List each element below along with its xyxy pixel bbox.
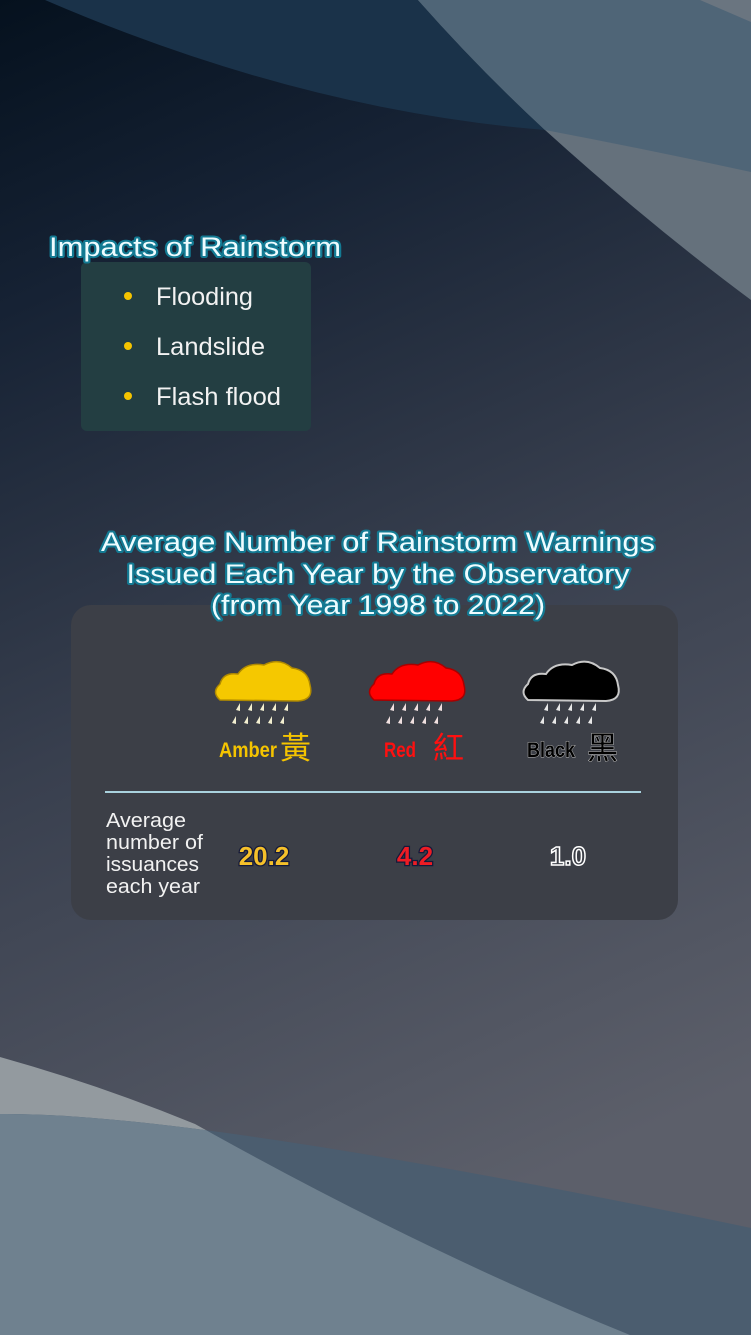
value: red: 4.2 [397,841,433,871]
decoration: top right wedge [418,0,751,300]
text block: row label: Average [106,810,186,832]
heading: Impacts of Rainstorm: Impacts of Rainstorm [49,232,341,262]
icon: black rainstorm: 黑 [587,723,618,768]
icon: red rainstorm: Red [384,739,416,762]
icon: red rainstorm: 紅 [433,723,464,768]
heading: chart title: Average Number of Rainstorm Warnings [101,527,655,557]
bullet: Flash flood: Flash flood [156,383,281,411]
icon: amber rainstorm [216,662,311,768]
icon: amber rainstorm: Amber [219,739,277,762]
text block: row label: issuances [106,854,199,876]
panel: warnings table [71,605,678,920]
icon: black rainstorm [524,662,619,768]
bullet: Flooding: Flooding [156,283,253,311]
value: black: 1.0 [550,841,586,871]
text block: row label [106,810,203,898]
heading: chart title: Issued Each Year by the Observatory [126,559,630,589]
value: amber: 20.2 [239,841,289,871]
icon: black rainstorm: Black [527,739,575,762]
icon: red rainstorm [370,662,465,768]
decoration: bottom shapes [0,1057,630,1335]
decoration: top band [45,0,751,172]
heading: chart title: (from Year 1998 to 2022) [211,590,545,620]
bullet: Landslide: Landslide [156,333,265,361]
panel: impacts list box [81,262,311,431]
text block: row label: number of [106,832,203,854]
heading: chart title [101,527,655,620]
text block: row label: each year [106,876,200,898]
list: impacts [124,283,281,411]
icon: amber rainstorm: 黃 [280,723,311,768]
